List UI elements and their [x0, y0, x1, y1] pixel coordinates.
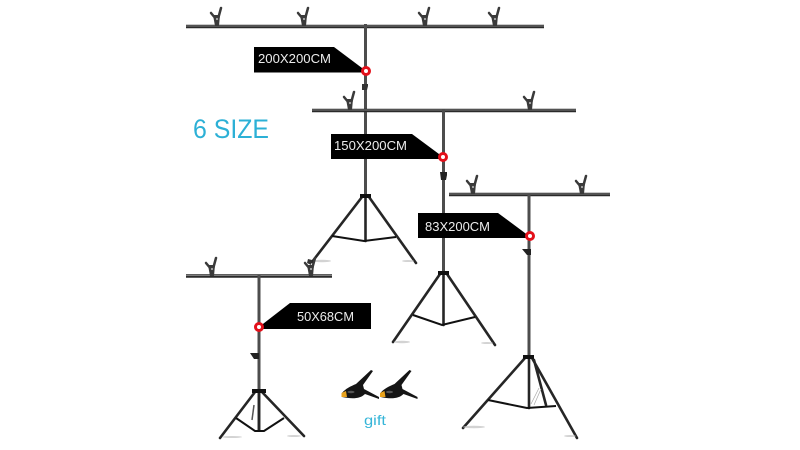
pole	[528, 194, 530, 357]
heading: 6 SIZE: 6 SIZE	[193, 114, 269, 144]
crossbar	[186, 24, 544, 28]
gift label: gift	[364, 412, 386, 428]
callout: 83X200CM: 83X200CM	[425, 220, 490, 234]
stand: 150X200CM	[312, 92, 576, 345]
callout: 50X68CM	[256, 303, 371, 330]
icon: gift clamps	[342, 370, 418, 399]
stand: 200X200CM	[186, 8, 544, 265]
crossbar	[312, 108, 576, 112]
tripod	[463, 355, 577, 438]
crossbar	[449, 192, 610, 196]
pole	[442, 109, 445, 273]
pole	[364, 24, 367, 196]
stand: 83X200CM	[418, 176, 610, 438]
pole knob	[522, 249, 531, 255]
callout: 150X200CM	[331, 134, 446, 160]
clamps	[467, 176, 586, 194]
clamps	[344, 92, 534, 110]
pole knob	[250, 353, 259, 359]
clamps	[206, 258, 315, 276]
callout: 83X200CM	[418, 213, 534, 240]
clamps	[211, 8, 499, 26]
callout: 150X200CM: 150X200CM	[334, 139, 407, 153]
stand: 50X68CM	[186, 258, 371, 438]
tripod	[220, 389, 304, 438]
callout: 200X200CM: 200X200CM	[258, 52, 331, 66]
tripod	[393, 271, 495, 345]
tripod	[307, 194, 416, 265]
callout: 200X200CM	[254, 47, 370, 74]
pole	[258, 275, 260, 430]
callout: 50X68CM: 50X68CM	[297, 310, 354, 324]
pole knob	[440, 172, 447, 180]
crossbar	[186, 274, 332, 278]
pole knob	[362, 84, 368, 90]
